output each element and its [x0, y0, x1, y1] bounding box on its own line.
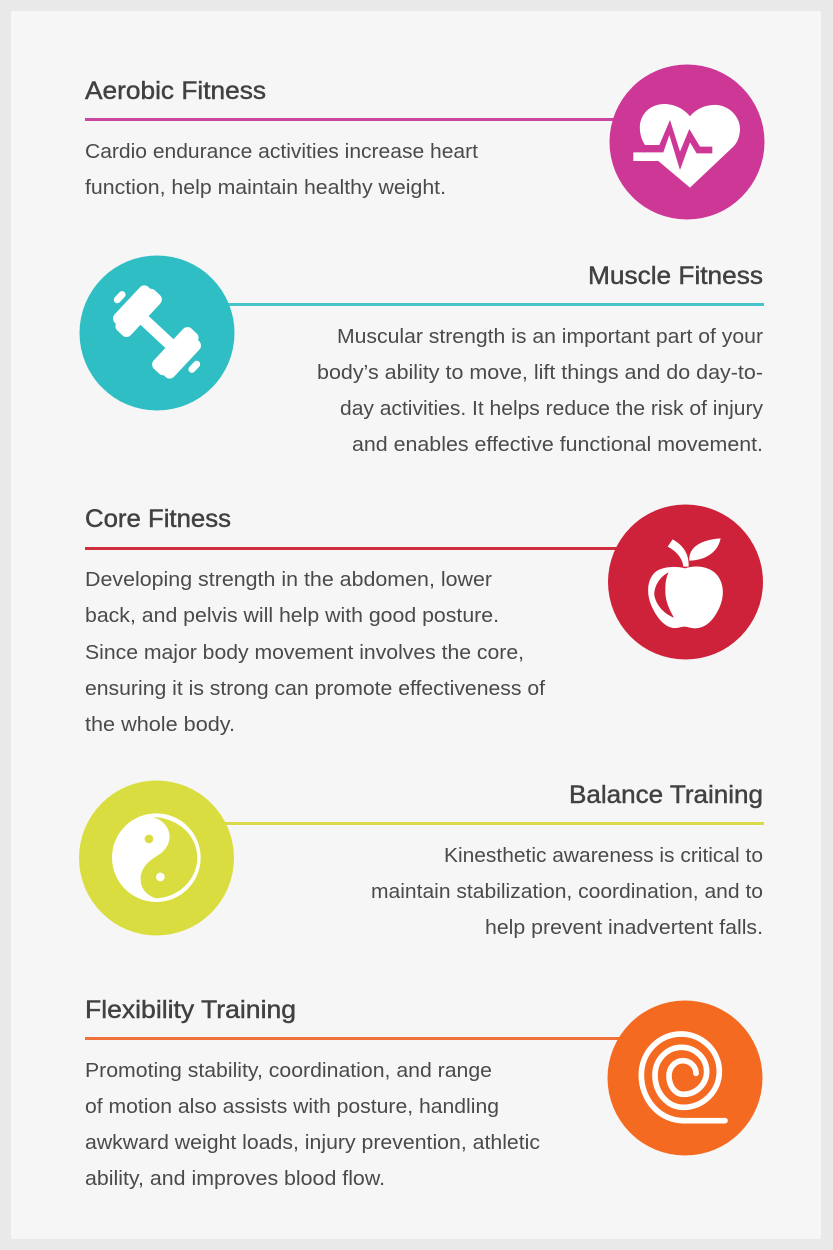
text: core description: the whole body. — [85, 714, 235, 736]
text: core description: Developing strength in the abdomen, lower — [85, 569, 492, 591]
rule: aerobic — [85, 118, 617, 121]
heading: aerobic fitness: Aerobic Fitness — [85, 77, 266, 105]
heading: flexibility training: Flexibility Training — [85, 996, 296, 1024]
rule: core — [85, 547, 622, 550]
icon: yin yang — [79, 780, 234, 936]
rule: flexibility — [85, 1037, 622, 1040]
text: balance description — [371, 845, 763, 939]
text: balance description: help prevent inadvertent falls. — [485, 917, 763, 939]
icon: dumbbell — [80, 256, 234, 410]
panel: aerobic fitness — [85, 64, 764, 220]
text: flexibility description: ability, and improves blood flow. — [85, 1168, 385, 1190]
text: core description: back, and pelvis will help with good posture. — [85, 605, 499, 627]
text: flexibility description: of motion also assists with posture, handling — [85, 1096, 499, 1118]
panel: core fitness — [85, 504, 763, 736]
text: muscle description: and enables effective functional movement. — [352, 434, 763, 456]
text: aerobic description: function, help maintain healthy weight. — [85, 177, 446, 199]
text: core description: ensuring it is strong can promote effectiveness of — [85, 678, 545, 700]
text: muscle description: day activities. It helps reduce the risk of injury — [340, 398, 763, 420]
icon: rolled mat — [608, 1000, 762, 1156]
text: balance description: Kinesthetic awareness is critical to — [444, 845, 763, 867]
text: balance description: maintain stabilization, coordination, and to — [371, 881, 763, 903]
icon: heart with pulse — [610, 64, 764, 220]
text: flexibility description: awkward weight loads, injury prevention, athletic — [85, 1132, 540, 1154]
text: muscle description: body’s ability to move, lift things and do day-to- — [317, 362, 763, 384]
rule: muscle — [228, 303, 764, 306]
panel: flexibility training — [85, 996, 762, 1190]
panel: balance training — [79, 780, 764, 939]
heading: muscle fitness: Muscle Fitness — [588, 262, 763, 290]
text: flexibility description — [85, 1060, 540, 1190]
text: core description: Since major body movement involves the core, — [85, 642, 524, 664]
text: muscle description — [317, 326, 763, 456]
heading: core fitness: Core Fitness — [85, 505, 231, 533]
rule: balance — [225, 822, 764, 825]
text: aerobic description: Cardio endurance activities increase heart — [85, 141, 478, 163]
icon: apple — [608, 504, 763, 660]
text: flexibility description: Promoting stability, coordination, and range — [85, 1060, 492, 1082]
text: muscle description: Muscular strength is an important part of your — [337, 326, 763, 348]
panel: muscle fitness — [80, 256, 764, 456]
heading: balance training: Balance Training — [569, 781, 763, 809]
text: aerobic description — [85, 141, 478, 199]
text: core description — [85, 569, 545, 736]
